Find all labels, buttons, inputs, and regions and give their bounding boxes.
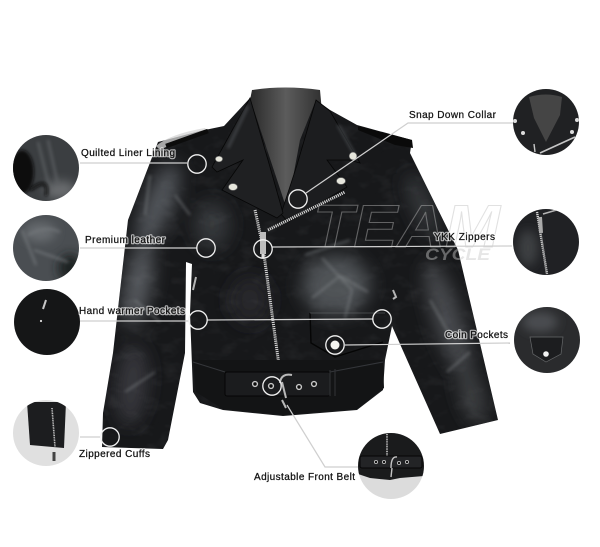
label: coin pockets: Coin Pockets (445, 330, 508, 341)
jacket body and sleeves (102, 98, 498, 449)
label: ykk zippers: YKK Zippers (434, 232, 495, 243)
detail circle: quilted liner lining (10, 135, 79, 201)
left collar and lapel (212, 98, 283, 218)
side buckles (193, 277, 396, 299)
label: premium leather: Premium leather (85, 235, 166, 246)
leather highlights (114, 158, 490, 427)
marker rings (101, 155, 391, 446)
label: zippered cuffs: Zippered Cuffs (79, 449, 150, 460)
label: premium leather: Premium leather (85, 235, 166, 246)
callout lines (80, 123, 519, 467)
label: ykk zippers: YKK Zippers (434, 232, 495, 243)
watermark: TEAM (313, 193, 502, 260)
label: snap down collar: Snap Down Collar (409, 110, 497, 121)
right epaulette (358, 126, 413, 148)
detail circle: coin pockets (514, 307, 580, 373)
left epaulette (156, 128, 208, 150)
label: quilted liner lining: Quilted Liner Lining (81, 148, 175, 159)
right collar and lapel (281, 100, 360, 222)
detail circle: ykk zippers (513, 209, 579, 275)
detail circle: hand warmer pockets (14, 289, 80, 355)
snaps (215, 152, 357, 190)
detail circle: premium leather (13, 215, 82, 282)
zipper (255, 192, 345, 373)
buckle (280, 375, 292, 408)
detail circle: snap down collar (513, 89, 579, 155)
label: adjustable front belt: Adjustable Front Belt (254, 472, 355, 483)
detail circle: zippered cuffs (13, 400, 79, 466)
waist belt (193, 360, 384, 415)
eyelets (253, 382, 316, 389)
jacket (102, 97, 498, 449)
mannequin neck (250, 88, 322, 214)
label: coin pockets: Coin Pockets (445, 330, 508, 341)
label: hand warmer pockets: Hand warmer Pockets (79, 306, 185, 317)
coin pocket (310, 313, 383, 357)
label: hand warmer pockets: Hand warmer Pockets (79, 306, 185, 317)
label: zippered cuffs: Zippered Cuffs (79, 449, 150, 460)
label: snap down collar: Snap Down Collar (409, 110, 497, 121)
label: adjustable front belt: Adjustable Front Belt (254, 472, 355, 483)
label: quilted liner lining: Quilted Liner Lining (81, 148, 175, 159)
detail circle: adjustable front belt (358, 433, 424, 499)
watermark: CYCLE (425, 245, 491, 264)
